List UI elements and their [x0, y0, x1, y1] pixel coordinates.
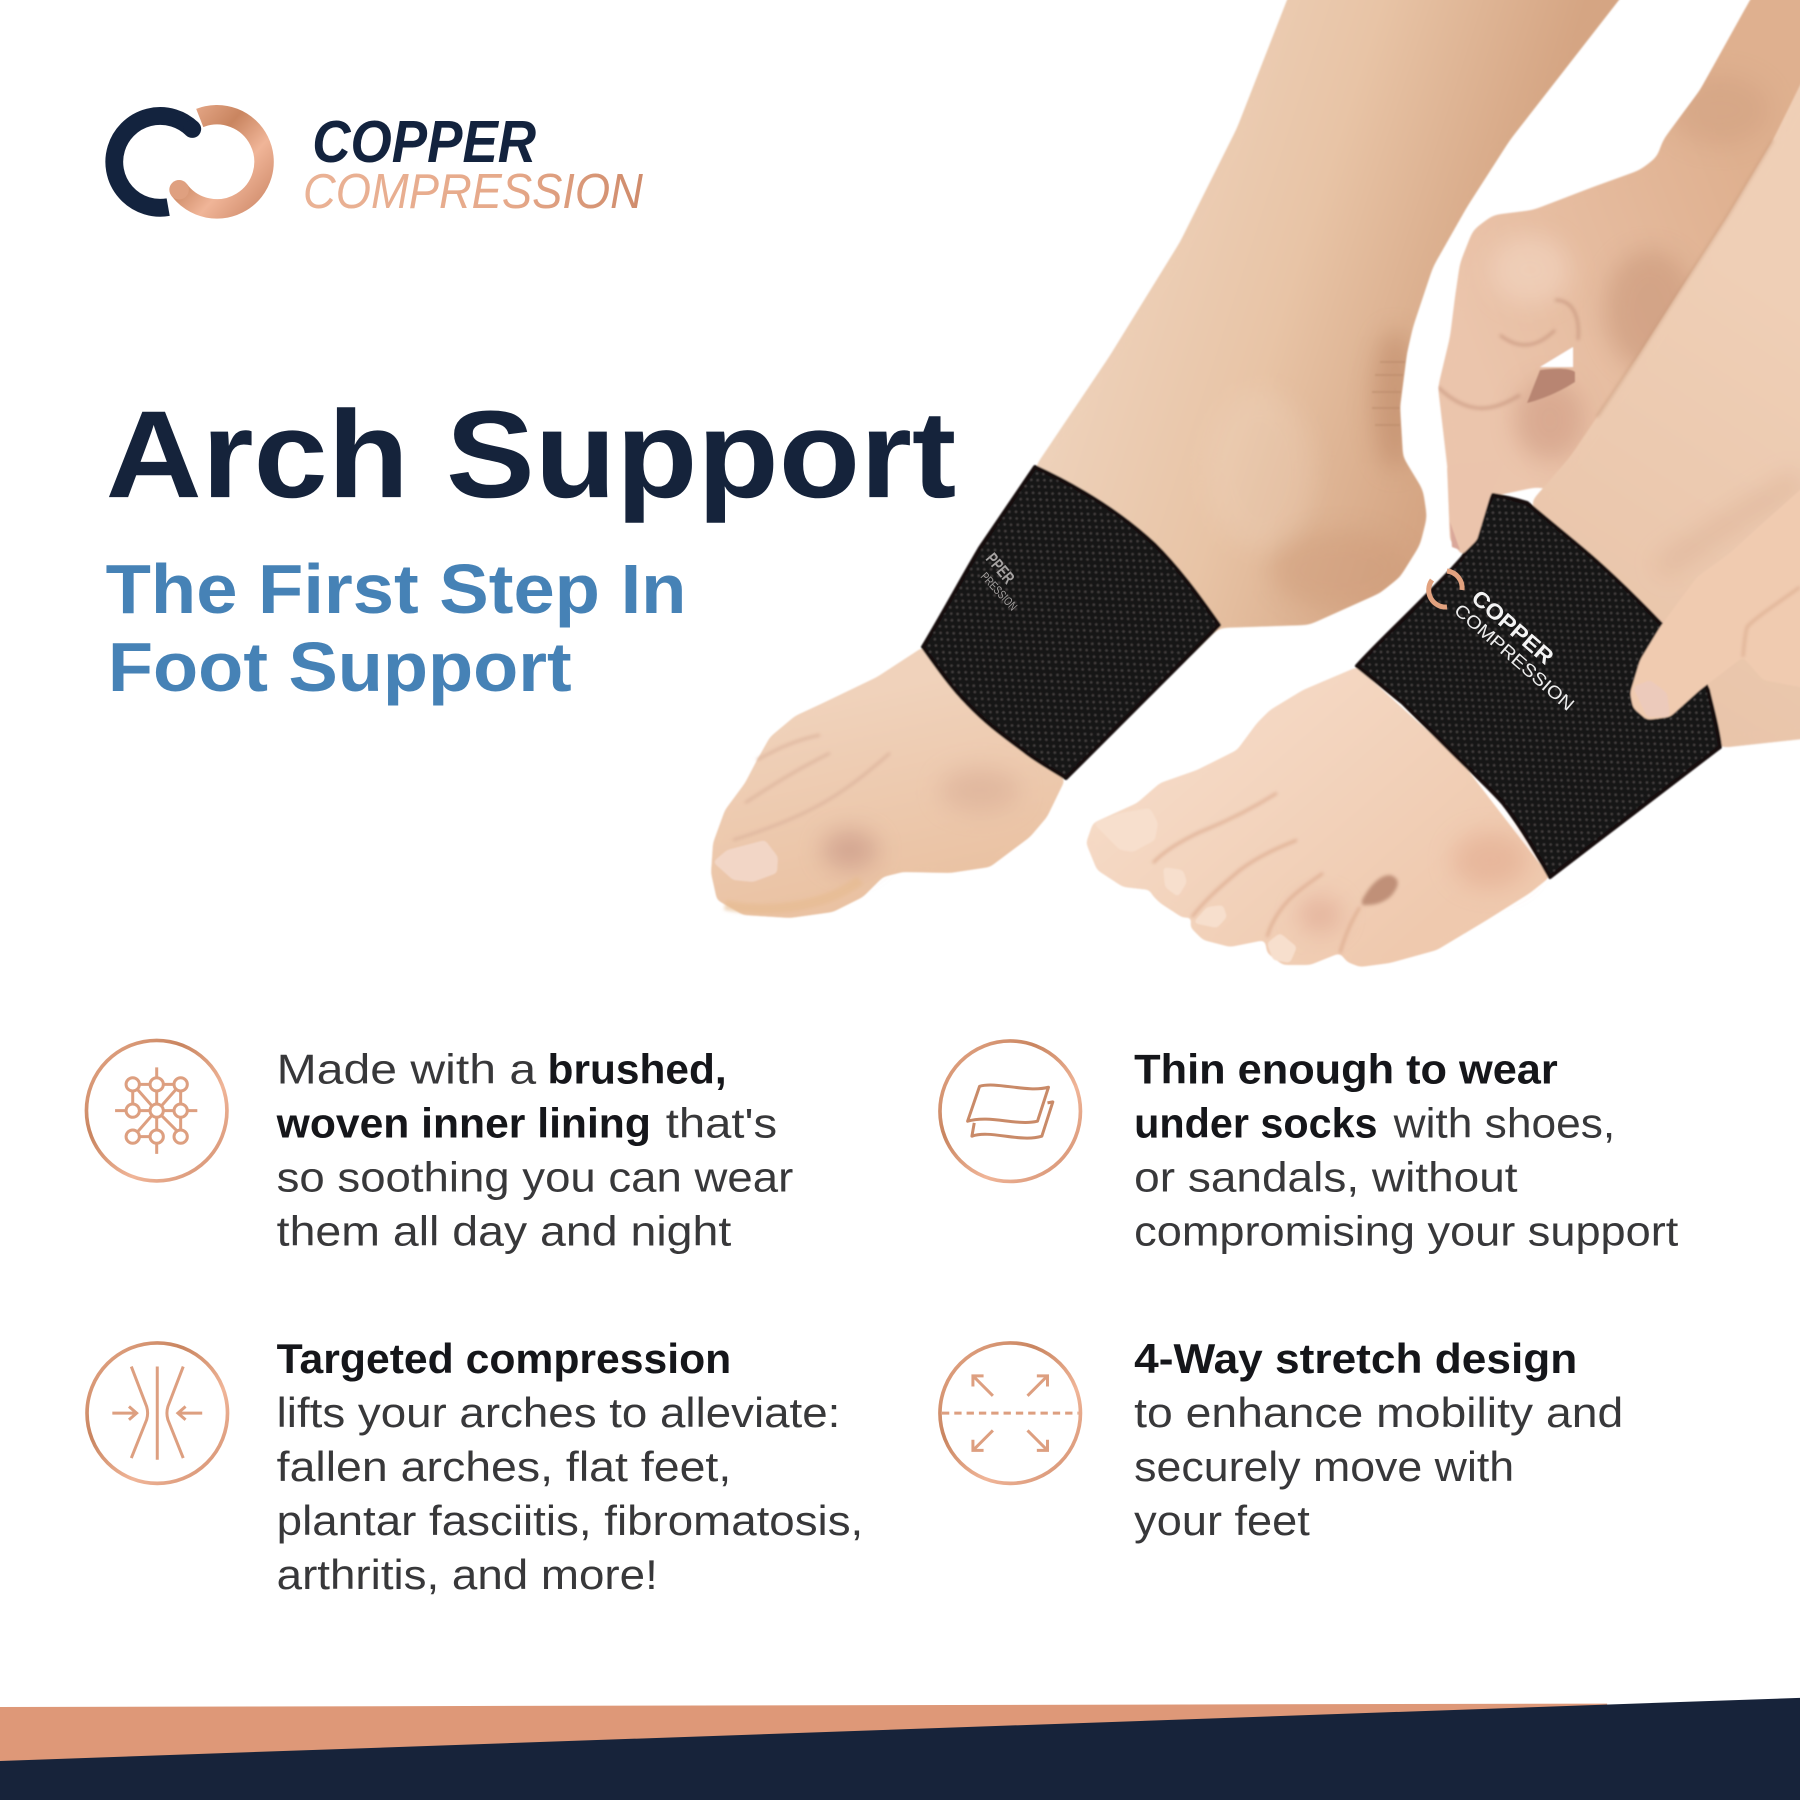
subtitle: The First Step In — [106, 550, 686, 628]
brand logo — [114, 108, 643, 219]
sleeve logo: right foot — [1429, 571, 1578, 715]
text: targeted compression: fallen arches, flat feet, — [277, 1444, 731, 1490]
icon: woven network — [86, 1040, 227, 1181]
text: woven inner lining: so soothing you can wear — [277, 1155, 794, 1201]
icon: thin layers — [940, 1041, 1080, 1181]
text: thin enough: under socks — [1134, 1101, 1378, 1147]
text: 4-way stretch — [1134, 1336, 1623, 1544]
sleeve logo text: left foot: PPER — [982, 549, 1018, 588]
text: woven inner lining: brushed, — [548, 1047, 727, 1093]
subtitle — [106, 550, 686, 706]
feature: 4-way stretch — [940, 1336, 1623, 1544]
sleeve logo text: COPPER — [1467, 585, 1559, 669]
text: woven inner lining: that's — [666, 1101, 777, 1147]
hand and forearm pinching the sleeve — [1438, 0, 1800, 496]
left leg and heel — [1036, 0, 1620, 669]
footer: navy band — [0, 1698, 1800, 1800]
text: woven inner lining: Made with a — [277, 1047, 536, 1093]
text: 4-way stretch: 4-Way stretch design — [1134, 1336, 1577, 1382]
text: 4-way stretch: your feet — [1134, 1498, 1310, 1544]
sleeve logo text: left foot: PRESSION — [978, 569, 1020, 613]
text: thin enough: Thin enough to wear — [1134, 1047, 1558, 1093]
photo: feet wearing arch support sleeves — [711, 0, 1800, 967]
text: 4-way stretch: to enhance mobility and — [1134, 1390, 1623, 1436]
logo wordmark: COPPER — [312, 108, 536, 175]
logo wordmark: COMPRESSION — [303, 164, 643, 219]
right leg — [1530, 55, 1800, 748]
text: targeted compression — [277, 1336, 863, 1598]
text: 4-way stretch: securely move with — [1134, 1444, 1514, 1490]
feature: woven inner lining — [86, 1040, 794, 1255]
sleeve logo mark — [1429, 571, 1462, 607]
text: targeted compression: Targeted compression — [277, 1336, 731, 1382]
subtitle: Foot Support — [108, 628, 572, 706]
fingertip over the sleeve — [1447, 460, 1505, 555]
text: targeted compression: plantar fasciitis, fibromatosis, — [277, 1498, 863, 1544]
left foot — [711, 647, 1065, 918]
text: woven inner lining — [276, 1047, 794, 1255]
sleeve logo text: COMPRESSION — [1450, 600, 1578, 715]
text: thin enough — [1134, 1047, 1679, 1255]
right foot with toes — [1086, 667, 1550, 967]
icon: compression arrows — [87, 1343, 228, 1483]
text: thin enough: with shoes, — [1393, 1101, 1615, 1147]
text: targeted compression: arthritis, and more! — [277, 1552, 658, 1598]
text: woven inner lining: woven inner lining — [276, 1101, 651, 1147]
title: Arch Support — [106, 386, 956, 524]
logo wordmark — [303, 108, 643, 219]
text: targeted compression: lifts your arches to alleviate: — [277, 1390, 840, 1436]
text: woven inner lining: them all day and night — [277, 1209, 732, 1255]
text: thin enough: compromising your support — [1134, 1209, 1679, 1255]
icon: four-way stretch arrows — [940, 1343, 1080, 1483]
sleeve logo text: left foot — [978, 549, 1020, 613]
thumb and second hand over the sleeve — [1630, 460, 1800, 720]
footer: copper stripe — [0, 1704, 1607, 1768]
right foot compression sleeve — [1357, 495, 1720, 877]
feature: thin enough — [940, 1041, 1679, 1255]
feature: targeted compression — [87, 1336, 863, 1598]
text: thin enough: or sandals, without — [1134, 1155, 1518, 1201]
left foot compression sleeve — [923, 467, 1219, 778]
logo mark — [114, 115, 264, 209]
left foot toenail — [713, 840, 778, 882]
